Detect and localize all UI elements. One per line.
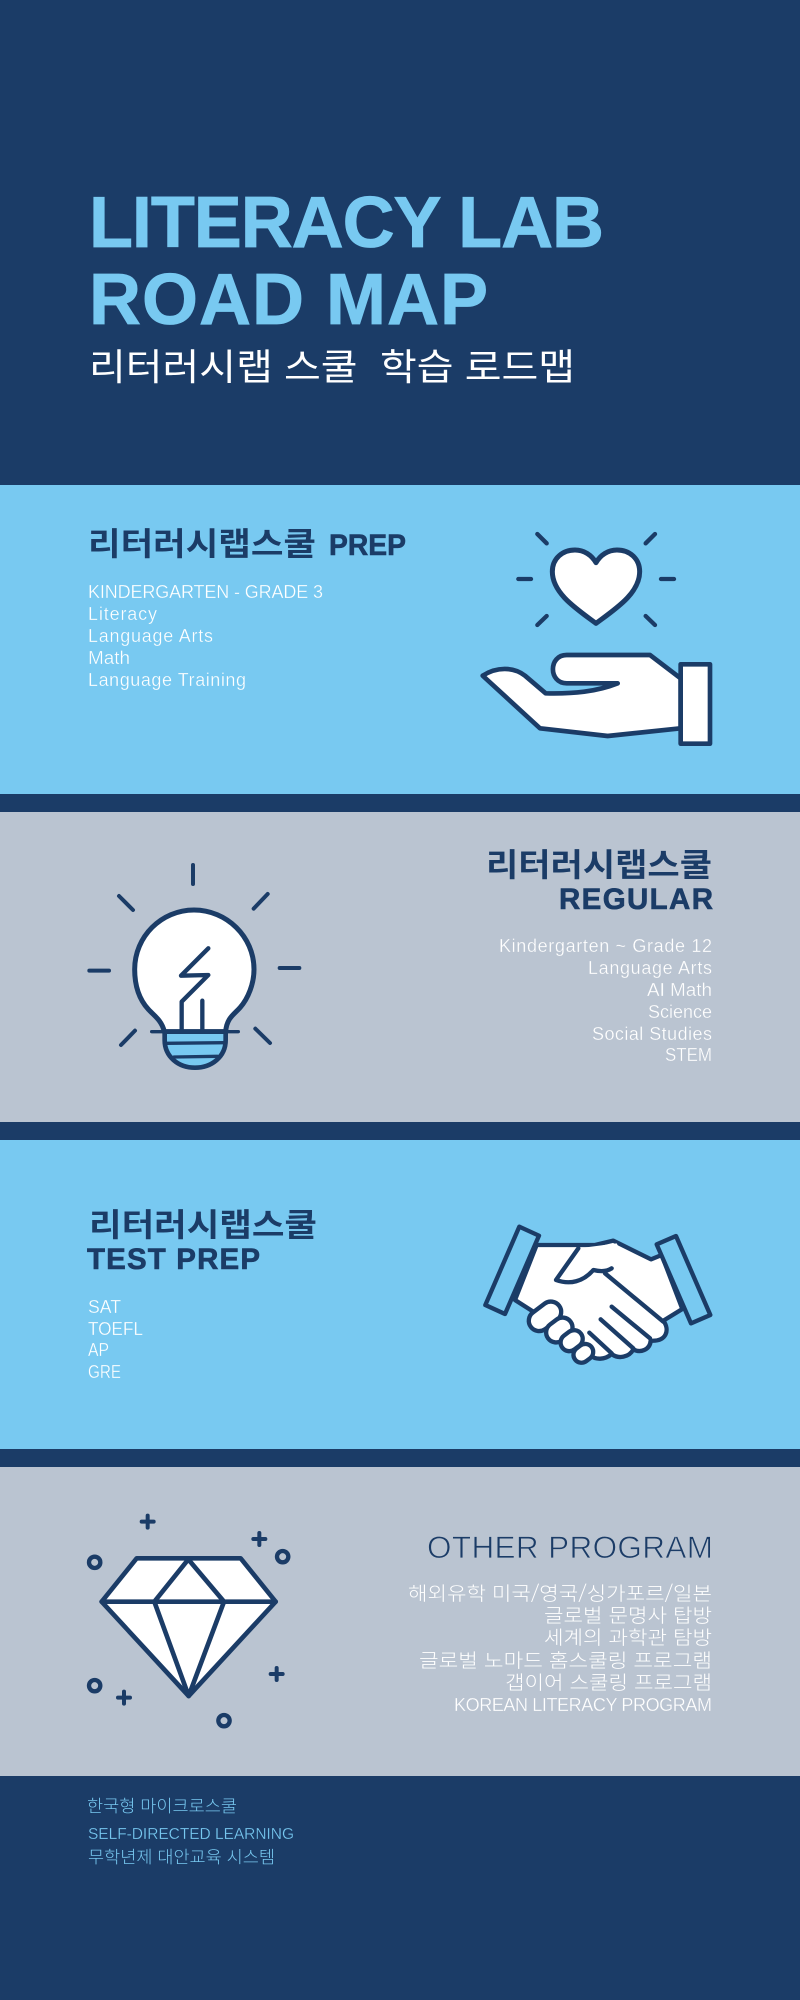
text block: prep subjects: KINDERGARTEN - GRADE 3 xyxy=(88,582,323,602)
text block: prep subjects: Literacy xyxy=(88,604,157,624)
subtitle: 리터러시랩 스쿨 학습 로드맵 xyxy=(89,337,575,391)
footer text xyxy=(87,1792,294,1868)
text block: regular subjects: Language Arts xyxy=(588,958,712,978)
text block: prep subjects: Math xyxy=(88,648,130,668)
heading: regular xyxy=(486,840,713,916)
panel: regular xyxy=(0,812,800,1122)
text block: test prep exams: GRE xyxy=(88,1362,121,1382)
text block: other programs list: KOREAN LITERACY PROGRAM xyxy=(454,1695,712,1715)
heading: regular: REGULAR xyxy=(559,883,713,916)
panel: test prep xyxy=(0,1140,800,1449)
text block: regular subjects: AI Math xyxy=(647,980,712,1000)
icon: light bulb xyxy=(89,865,299,1068)
heading: prep xyxy=(88,519,406,565)
heading: test prep: 리터러시랩스쿨 xyxy=(89,1200,317,1246)
heading: test prep xyxy=(87,1200,317,1276)
text block: other programs list: 세계의 과학관 탐방 xyxy=(544,1623,712,1650)
title xyxy=(89,183,604,340)
text block: other programs list xyxy=(408,1579,712,1715)
panel: prep xyxy=(0,485,800,794)
text block: test prep exams: TOEFL xyxy=(88,1319,143,1339)
text block: regular subjects: Social Studies xyxy=(592,1024,712,1044)
heading: other program: OTHER PROGRAM xyxy=(427,1529,713,1565)
heading: test prep: TEST PREP xyxy=(87,1243,260,1276)
text block: other programs list: 글로벌 노마드 홈스쿨링 프로그램 xyxy=(419,1646,712,1673)
text block: other programs list: 갭이어 스쿨링 프로그램 xyxy=(505,1668,712,1695)
text block: regular subjects: Science xyxy=(648,1002,712,1022)
text block: other programs list: 해외유학 미국/영국/싱가포르/일본 xyxy=(408,1579,712,1606)
title: ROAD MAP xyxy=(89,260,488,340)
text block: prep subjects xyxy=(88,582,323,690)
heading: prep: PREP xyxy=(329,529,406,562)
text block: regular subjects: Kindergarten ~ Grade 12 xyxy=(499,936,712,956)
panel: title header xyxy=(89,183,604,391)
title: LITERACY LAB xyxy=(89,183,604,263)
text block: regular subjects: STEM xyxy=(665,1045,712,1065)
text block: test prep exams: SAT xyxy=(88,1297,121,1317)
heading: prep: 리터러시랩스쿨 xyxy=(88,519,316,565)
icon: handshake xyxy=(485,1227,710,1366)
panel: other program xyxy=(0,1467,800,1776)
text block: prep subjects: Language Arts xyxy=(88,626,213,646)
text block: test prep exams xyxy=(88,1297,143,1382)
icon: diamond xyxy=(89,1516,288,1726)
text block: other programs list: 글로벌 문명사 탑방 xyxy=(544,1601,712,1628)
heading: regular: 리터러시랩스쿨 xyxy=(486,840,712,886)
text block: prep subjects: Language Training xyxy=(88,670,246,690)
footer text: 한국형 마이크로스쿨 xyxy=(87,1792,237,1817)
text block: test prep exams: AP xyxy=(88,1340,109,1360)
footer text: SELF-DIRECTED LEARNING xyxy=(88,1826,294,1843)
footer text: 무학년제 대안교육 시스템 xyxy=(88,1843,275,1868)
text block: regular subjects xyxy=(499,936,712,1065)
icon: heart in open hand xyxy=(483,534,710,744)
